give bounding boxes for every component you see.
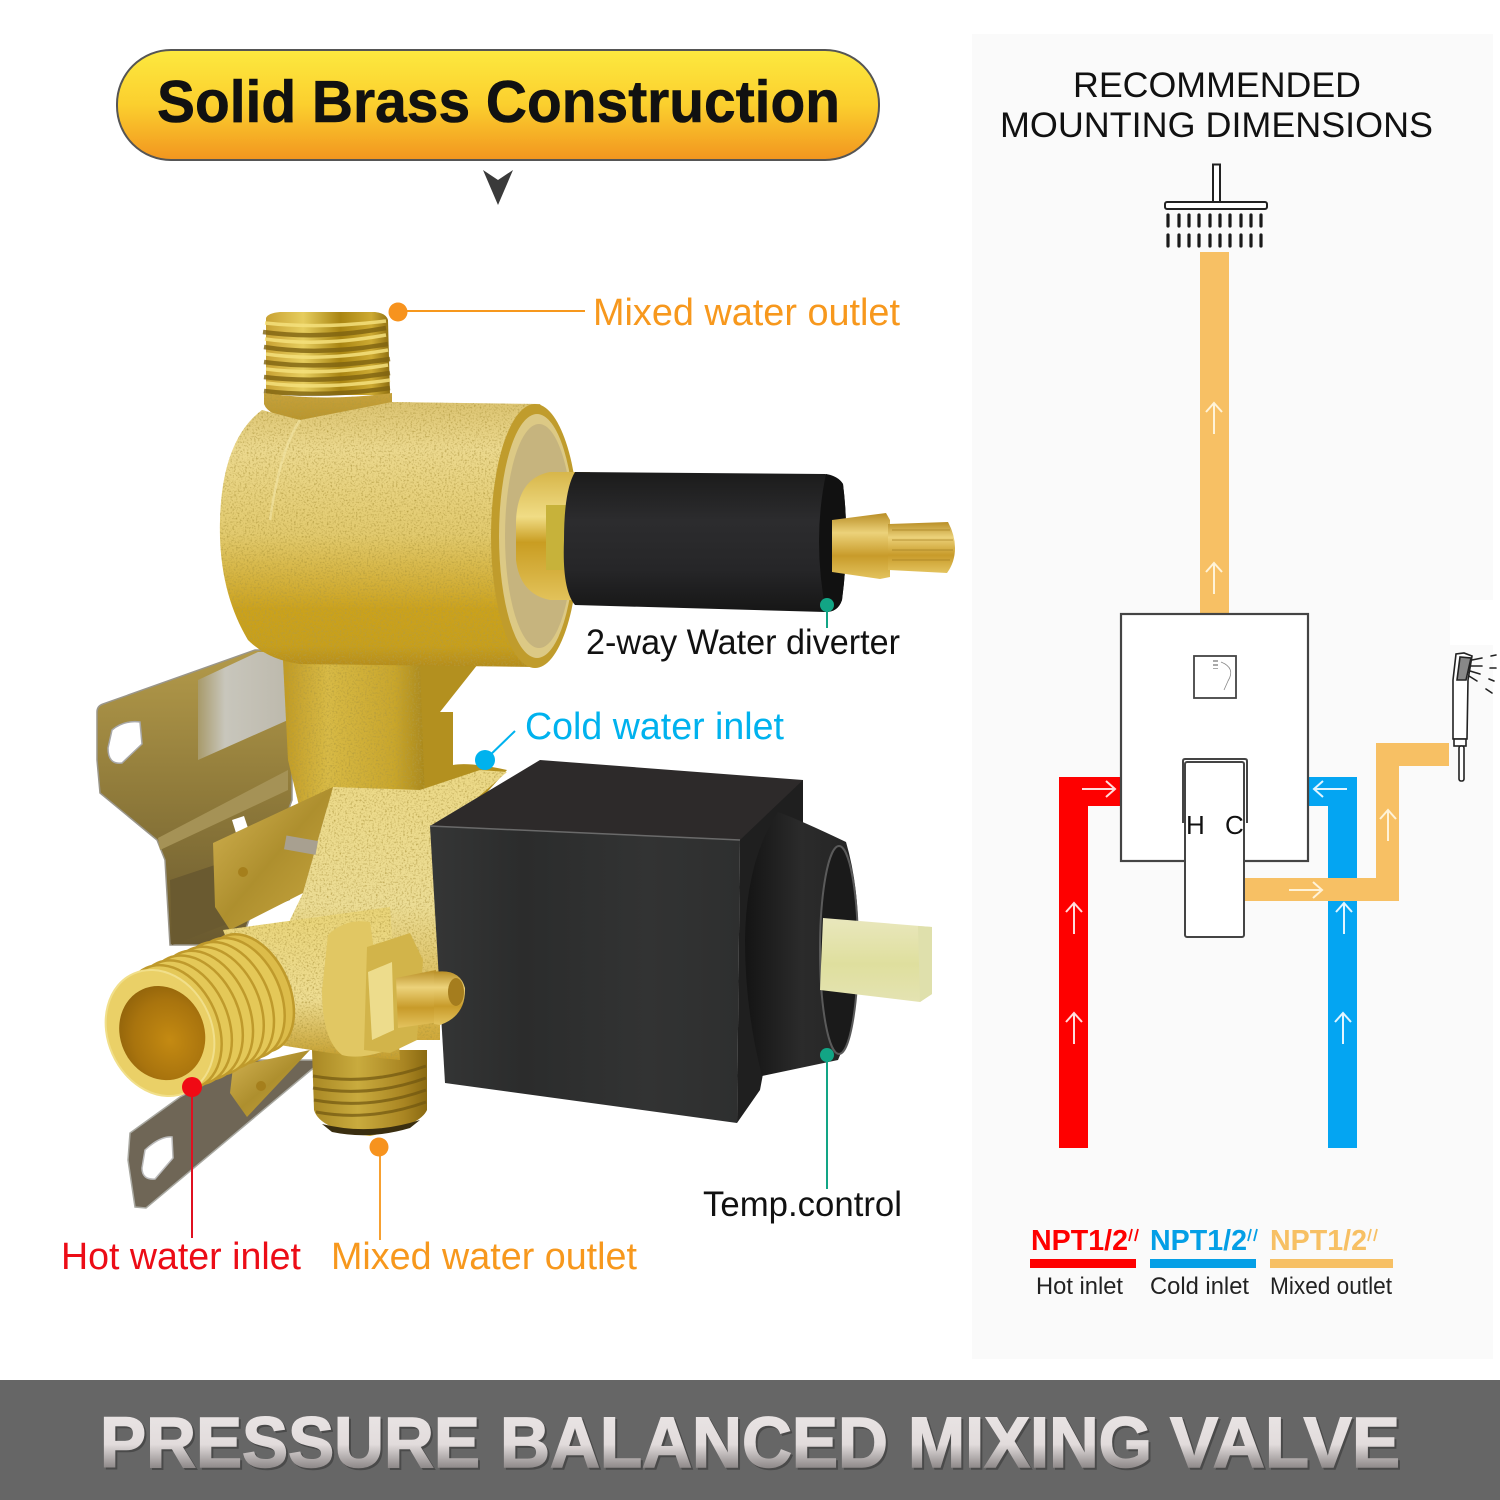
- lower cast body: [290, 770, 507, 1040]
- legend item: mixed outlet: Mixed outlet: [1270, 1273, 1392, 1300]
- banner text shadow: BALANCED: [502, 1406, 890, 1485]
- callout: top mixed water outlet: [388, 292, 900, 334]
- icon: hand shower: [1453, 653, 1496, 781]
- callout: cold water inlet: [475, 706, 784, 770]
- H and C marks: C: [1225, 810, 1244, 840]
- legend item: mixed outlet: [1270, 1225, 1393, 1300]
- outlet boss: [264, 393, 392, 422]
- rear mounting bracket: [97, 650, 292, 945]
- icon: rain shower head: [1165, 164, 1267, 246]
- banner text shadow: MIXING: [910, 1406, 1154, 1485]
- banner text: VALVE: [1170, 1404, 1400, 1483]
- banner text: MIXING: [908, 1404, 1152, 1483]
- legend item: cold inlet: NPT1/2: [1150, 1225, 1247, 1257]
- title badge: Solid Brass Construction: [157, 69, 840, 135]
- panel heading: [1000, 66, 1433, 145]
- collar behind diverter: [516, 472, 590, 600]
- legend: pipe sizes: [1030, 1225, 1393, 1300]
- neck rear rib: [420, 664, 507, 800]
- legend item: hot inlet: NPT1/2: [1031, 1225, 1128, 1257]
- callout: bottom mixed water outlet: [331, 1138, 637, 1278]
- title badge: [117, 50, 879, 160]
- banner text shadow: [102, 1406, 1402, 1485]
- pipe: hot inlet: [1059, 777, 1122, 1148]
- pipe: mixed outlet to shower head: [1200, 252, 1229, 614]
- banner text shadow: PRESSURE: [102, 1406, 482, 1485]
- hex nut and collar: [322, 921, 423, 1057]
- illustration: brass valve: [86, 312, 955, 1208]
- bottom threaded outlet: [312, 1050, 427, 1136]
- lower mounting bracket: [128, 1060, 323, 1208]
- casting seam: [270, 420, 300, 520]
- callout: cold water inlet: Cold water inlet: [525, 706, 784, 748]
- arrow below title: [483, 170, 513, 205]
- callout: 2-way water diverter: [586, 598, 900, 662]
- callout: hot water inlet: Hot water inlet: [61, 1236, 301, 1278]
- callout: top mixed water outlet: Mixed water outlet: [593, 292, 900, 334]
- pipe: cold inlet: [1307, 777, 1357, 1148]
- hot water inlet thread: [86, 917, 313, 1114]
- temperature stem: [820, 918, 932, 1002]
- callout: bottom mixed water outlet: Mixed water outlet: [331, 1236, 637, 1278]
- panel: recommended mounting dimensions: [972, 34, 1496, 1359]
- callout: temperature control: Temp.control: [703, 1185, 902, 1224]
- black cone sleeve: [745, 812, 858, 1076]
- front mounting plate: [213, 787, 333, 1117]
- diverter brass stem: [832, 513, 955, 579]
- pipe: mixed outlet to hand shower: [1244, 743, 1449, 901]
- banner text: [100, 1404, 1400, 1483]
- vertical neck: [283, 660, 432, 810]
- H and C marks: H: [1186, 810, 1205, 840]
- callout: 2-way water diverter: 2-way Water diverter: [586, 623, 900, 662]
- bottom banner: [0, 1380, 1500, 1500]
- body end face: [491, 404, 579, 668]
- black diverter cartridge: [564, 472, 846, 612]
- legend item: hot inlet: [1030, 1225, 1138, 1300]
- legend item: hot inlet: Hot inlet: [1036, 1273, 1123, 1300]
- diverter square icon: [1194, 656, 1236, 698]
- banner text: PRESSURE: [100, 1404, 480, 1483]
- top threaded outlet: [263, 312, 390, 395]
- callout: temperature control: [703, 1048, 902, 1224]
- temperature handle: [1183, 759, 1247, 937]
- legend item: cold inlet: [1150, 1225, 1257, 1300]
- banner text: BALANCED: [500, 1404, 888, 1483]
- H and C marks: [1186, 810, 1244, 840]
- panel heading: RECOMMENDED: [1073, 66, 1361, 105]
- valve trim plate: [1121, 614, 1308, 937]
- legend item: cold inlet: Cold inlet: [1150, 1273, 1249, 1300]
- brass adjusting screw: [396, 970, 465, 1028]
- main cast body: [220, 402, 578, 667]
- black temperature cube: [430, 760, 803, 1123]
- callout: hot water inlet: [61, 1077, 301, 1278]
- legend item: mixed outlet: NPT1/2: [1270, 1225, 1367, 1257]
- banner text shadow: VALVE: [1172, 1406, 1402, 1485]
- panel heading: MOUNTING DIMENSIONS: [1000, 106, 1433, 145]
- hot inlet branch casting: [223, 907, 400, 1060]
